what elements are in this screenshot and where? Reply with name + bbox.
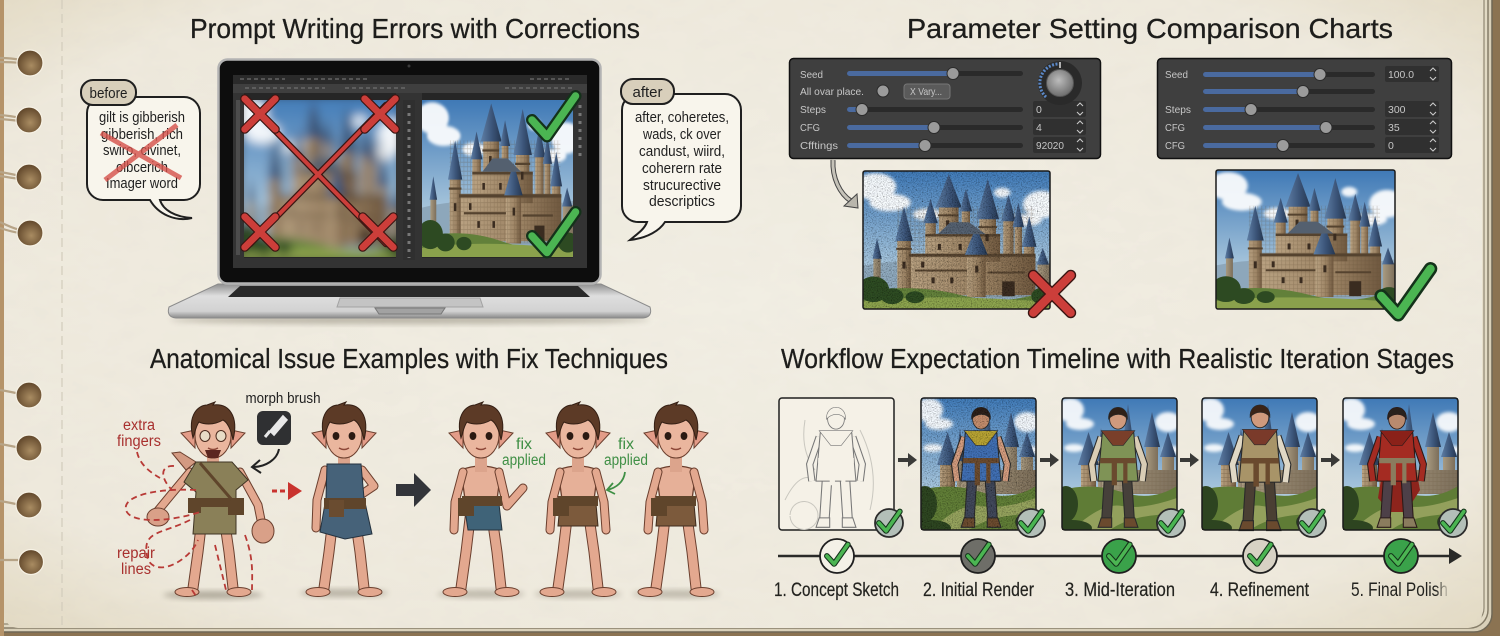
icon: morph brush bbox=[257, 411, 291, 445]
value fields: 92020 bbox=[1036, 140, 1064, 152]
settings panel: bad parameters: Seed bbox=[800, 69, 823, 81]
annotation: fix applied 2 bbox=[604, 436, 648, 469]
icon: red x bbox=[1033, 275, 1071, 313]
annotation: extra fingers: extra bbox=[123, 417, 155, 434]
variation button bbox=[904, 84, 950, 99]
callout: before speech bubble: olbcerich bbox=[116, 159, 168, 176]
anatomy figure: fixed pose 1 bbox=[437, 402, 525, 598]
annotation: fix applied 2: applied bbox=[604, 452, 648, 469]
callout: before speech bubble: Imager word bbox=[106, 175, 178, 192]
callout: after speech bubble: after, coheretes, bbox=[635, 109, 729, 126]
sharp after image bbox=[415, 100, 581, 257]
arrows between stages bbox=[898, 453, 1340, 467]
arrow: green fix bbox=[607, 472, 625, 494]
callout: after speech bubble: candust, wiird, bbox=[639, 143, 725, 160]
callout: after speech bubble: strucurective bbox=[643, 177, 721, 194]
value fields: 35 bbox=[1388, 122, 1400, 134]
value fields bbox=[1385, 66, 1439, 153]
arrow: dark bbox=[396, 473, 431, 507]
settings panel: good parameters bbox=[1158, 58, 1452, 158]
stage label 4: 4. Refinement bbox=[1210, 580, 1310, 601]
laptop screen bbox=[232, 75, 587, 268]
anatomy figure: partly repaired bbox=[300, 402, 388, 597]
annotation: fix applied 2: fix bbox=[618, 436, 634, 453]
callout: after speech bubble bbox=[621, 79, 741, 240]
blurred before image bbox=[244, 100, 396, 257]
arrow: settings to noisy image bbox=[833, 160, 858, 208]
stage label 2: 2. Initial Render bbox=[923, 580, 1035, 601]
clean castle image bbox=[1208, 170, 1405, 309]
settings panel: bad parameters: Steps bbox=[800, 104, 826, 116]
stage image 3: mid iteration bbox=[1052, 398, 1188, 536]
callout: after speech bubble: descriptics bbox=[649, 193, 715, 210]
annotation: fix applied 1: fix bbox=[516, 436, 532, 453]
binding holes bbox=[0, 50, 44, 574]
stage label 5: 5. Final Polish bbox=[1351, 580, 1448, 601]
red x marks bbox=[245, 99, 395, 247]
settings panel: good parameters: CFG bbox=[1165, 140, 1185, 152]
callout: before speech bubble bbox=[81, 80, 200, 219]
settings panel: bad parameters: CFG bbox=[800, 122, 820, 134]
arrow: brush to figure bbox=[252, 449, 279, 473]
annotation: fix applied 1 bbox=[502, 436, 546, 469]
annotation: repair lines bbox=[117, 545, 155, 578]
anatomy figure: broken goblin bbox=[147, 402, 274, 599]
settings panel: bad parameters: All ovar place. bbox=[800, 86, 864, 98]
settings panel: bad parameters: Cfftings bbox=[800, 140, 838, 152]
icon: green check bbox=[1381, 269, 1430, 315]
value fields: 0 bbox=[1036, 104, 1042, 116]
annotation: repair lines: repair bbox=[117, 545, 155, 562]
stage image 1: concept sketch bbox=[779, 398, 894, 530]
anatomy figure: fixed pose 2 bbox=[534, 402, 622, 598]
anatomy figure: fixed pose 3 bbox=[632, 402, 720, 598]
title: anatomical issues: Anatomical Issue Examples with Fix Techniques bbox=[150, 343, 668, 374]
settings panel: bad parameters bbox=[790, 58, 1100, 158]
settings panel: good parameters: CFG bbox=[1165, 122, 1185, 134]
callout: before speech bubble: gibberish, rich bbox=[101, 126, 183, 143]
noisy castle image bbox=[855, 171, 1060, 309]
value fields bbox=[1033, 101, 1086, 153]
stage image 5: final polish bbox=[1333, 398, 1469, 536]
callout: after speech bubble: coherern rate bbox=[642, 160, 722, 177]
annotation: extra fingers: fingers bbox=[117, 433, 161, 450]
callout: before speech bubble: swiro, civinet, bbox=[103, 142, 181, 159]
callout: before speech bubble: gilt is gibberish bbox=[99, 109, 185, 126]
callout: after speech bubble: wads, ck over bbox=[642, 126, 721, 143]
timeline nodes bbox=[820, 539, 1418, 573]
label: morph brush: morph brush bbox=[246, 391, 320, 407]
annotation: fix applied 1: applied bbox=[502, 452, 546, 469]
red dashed repair lines bbox=[126, 452, 252, 596]
laptop bbox=[168, 60, 651, 324]
variation button: X Vary... bbox=[910, 86, 942, 98]
settings panel: good parameters: Seed bbox=[1165, 69, 1188, 81]
arrow: red dashed bbox=[272, 482, 302, 500]
stage image 4: refinement bbox=[1192, 398, 1328, 536]
margin dashed line bbox=[61, 0, 63, 628]
value fields: 100.0 bbox=[1388, 69, 1414, 81]
left margin strip bbox=[0, 0, 4, 636]
stage check badges bbox=[875, 509, 1467, 537]
callout: before speech bubble: before bbox=[90, 85, 128, 102]
title: parameter setting: Parameter Setting Comparison Charts bbox=[907, 13, 1393, 44]
timeline axis bbox=[778, 548, 1462, 564]
callout: after speech bubble: after bbox=[632, 84, 663, 101]
value fields: 4 bbox=[1036, 122, 1042, 134]
value fields: 300 bbox=[1388, 104, 1406, 116]
green check marks bbox=[532, 96, 576, 252]
dial knob bbox=[1038, 61, 1082, 105]
annotation: extra fingers bbox=[117, 417, 161, 450]
stage image 2: initial render bbox=[911, 398, 1047, 536]
title: prompt writing errors: Prompt Writing Errors with Corrections bbox=[190, 13, 640, 44]
value fields: 0 bbox=[1388, 140, 1394, 152]
stage label 3: 3. Mid-Iteration bbox=[1065, 580, 1175, 601]
annotation: repair lines: lines bbox=[121, 561, 151, 578]
stage label 1: 1. Concept Sketch bbox=[774, 580, 899, 601]
settings panel: good parameters: Steps bbox=[1165, 104, 1191, 116]
